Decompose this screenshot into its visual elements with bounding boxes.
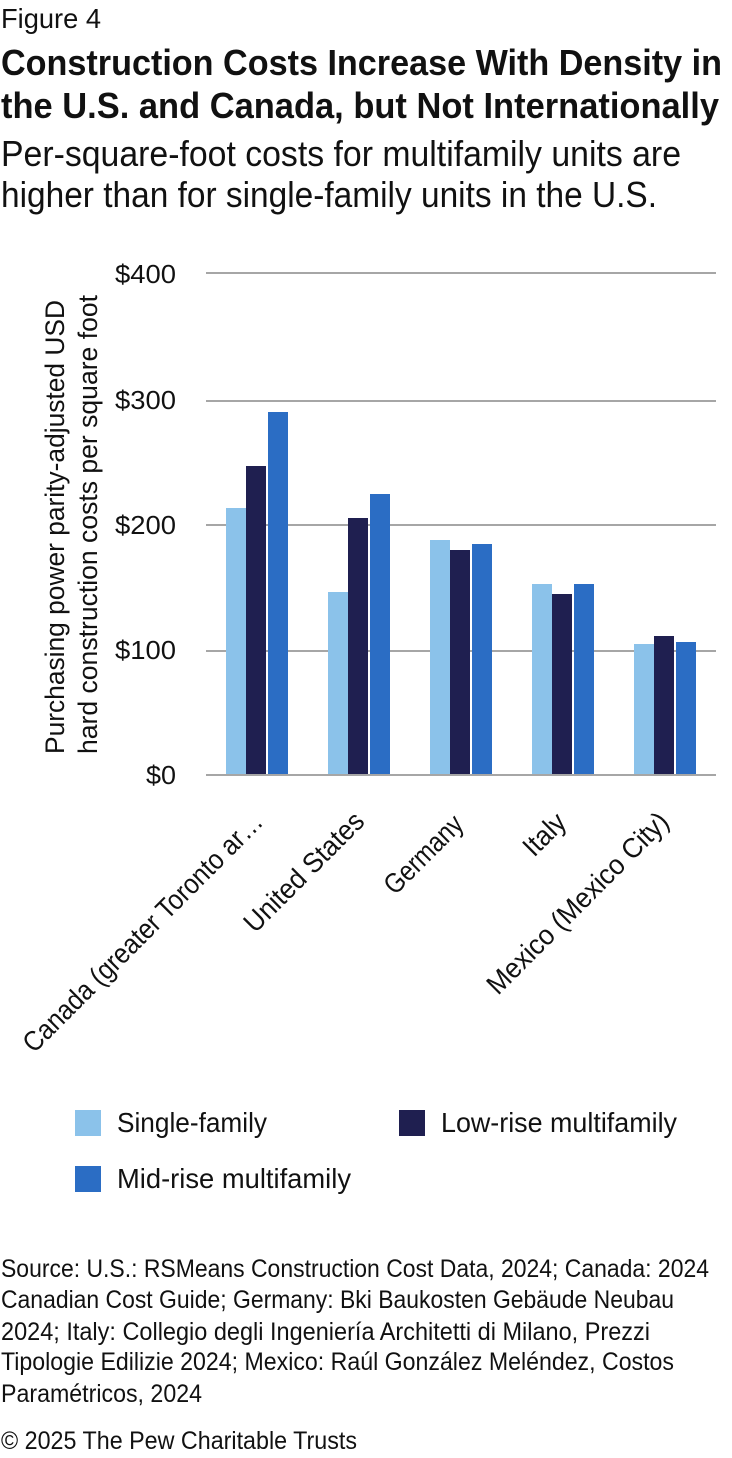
bars: Germany	[430, 540, 492, 774]
x axis category labels: Canada (greater Toronto ar…	[16, 806, 269, 1058]
legend: single-family: Single-family	[117, 1107, 267, 1138]
gridlines	[206, 272, 716, 776]
bars: Canada	[226, 412, 288, 774]
legend	[75, 1107, 677, 1194]
x axis category labels: Germany	[377, 808, 469, 900]
y axis title	[40, 295, 103, 754]
y axis tick labels: $400	[115, 259, 176, 289]
source note: 2024; Italy: Collegio degli Ingeniería Architetti di Milano, Prezzi	[1, 1318, 650, 1346]
bars: Italy	[532, 584, 594, 774]
x axis category labels: United States	[237, 805, 370, 938]
subtitle: higher than for single-family units in the U.S.	[1, 174, 657, 215]
y axis tick labels: $0	[146, 760, 176, 790]
y axis tick labels: $100	[115, 635, 176, 665]
legend: mid-rise multifamily: Mid-rise multifamily	[117, 1163, 351, 1194]
y axis title: hard construction costs per square foot	[73, 295, 103, 754]
subtitle	[1, 133, 681, 215]
bars: United States	[328, 494, 390, 774]
x axis category labels: Italy	[516, 806, 572, 862]
title: the U.S. and Canada, but Not Internationally	[1, 85, 719, 126]
bars: Mexico	[634, 636, 696, 774]
x axis category labels: Mexico (Mexico City)	[480, 806, 675, 1000]
y axis tick labels	[115, 259, 176, 790]
legend: low-rise multifamily: Low-rise multifamily	[441, 1107, 677, 1138]
y axis tick labels: $200	[115, 510, 176, 540]
subtitle: Per-square-foot costs for multifamily units are	[1, 133, 681, 174]
figure label: Figure 4	[1, 3, 101, 34]
source note	[1, 1255, 709, 1408]
title	[1, 42, 722, 126]
y axis tick labels: $300	[115, 385, 176, 415]
copyright: © 2025 The Pew Charitable Trusts	[1, 1427, 357, 1455]
source note: Tipologie Edilizie 2024; Mexico: Raúl González Meléndez, Costos	[1, 1348, 674, 1376]
source note: Canadian Cost Guide; Germany: Bki Baukosten Gebäude Neubau	[1, 1286, 674, 1314]
source note: Paramétricos, 2024	[1, 1380, 202, 1408]
x axis category labels	[16, 805, 675, 1058]
bar chart	[226, 412, 696, 774]
y axis title: Purchasing power parity-adjusted USD	[40, 300, 70, 754]
